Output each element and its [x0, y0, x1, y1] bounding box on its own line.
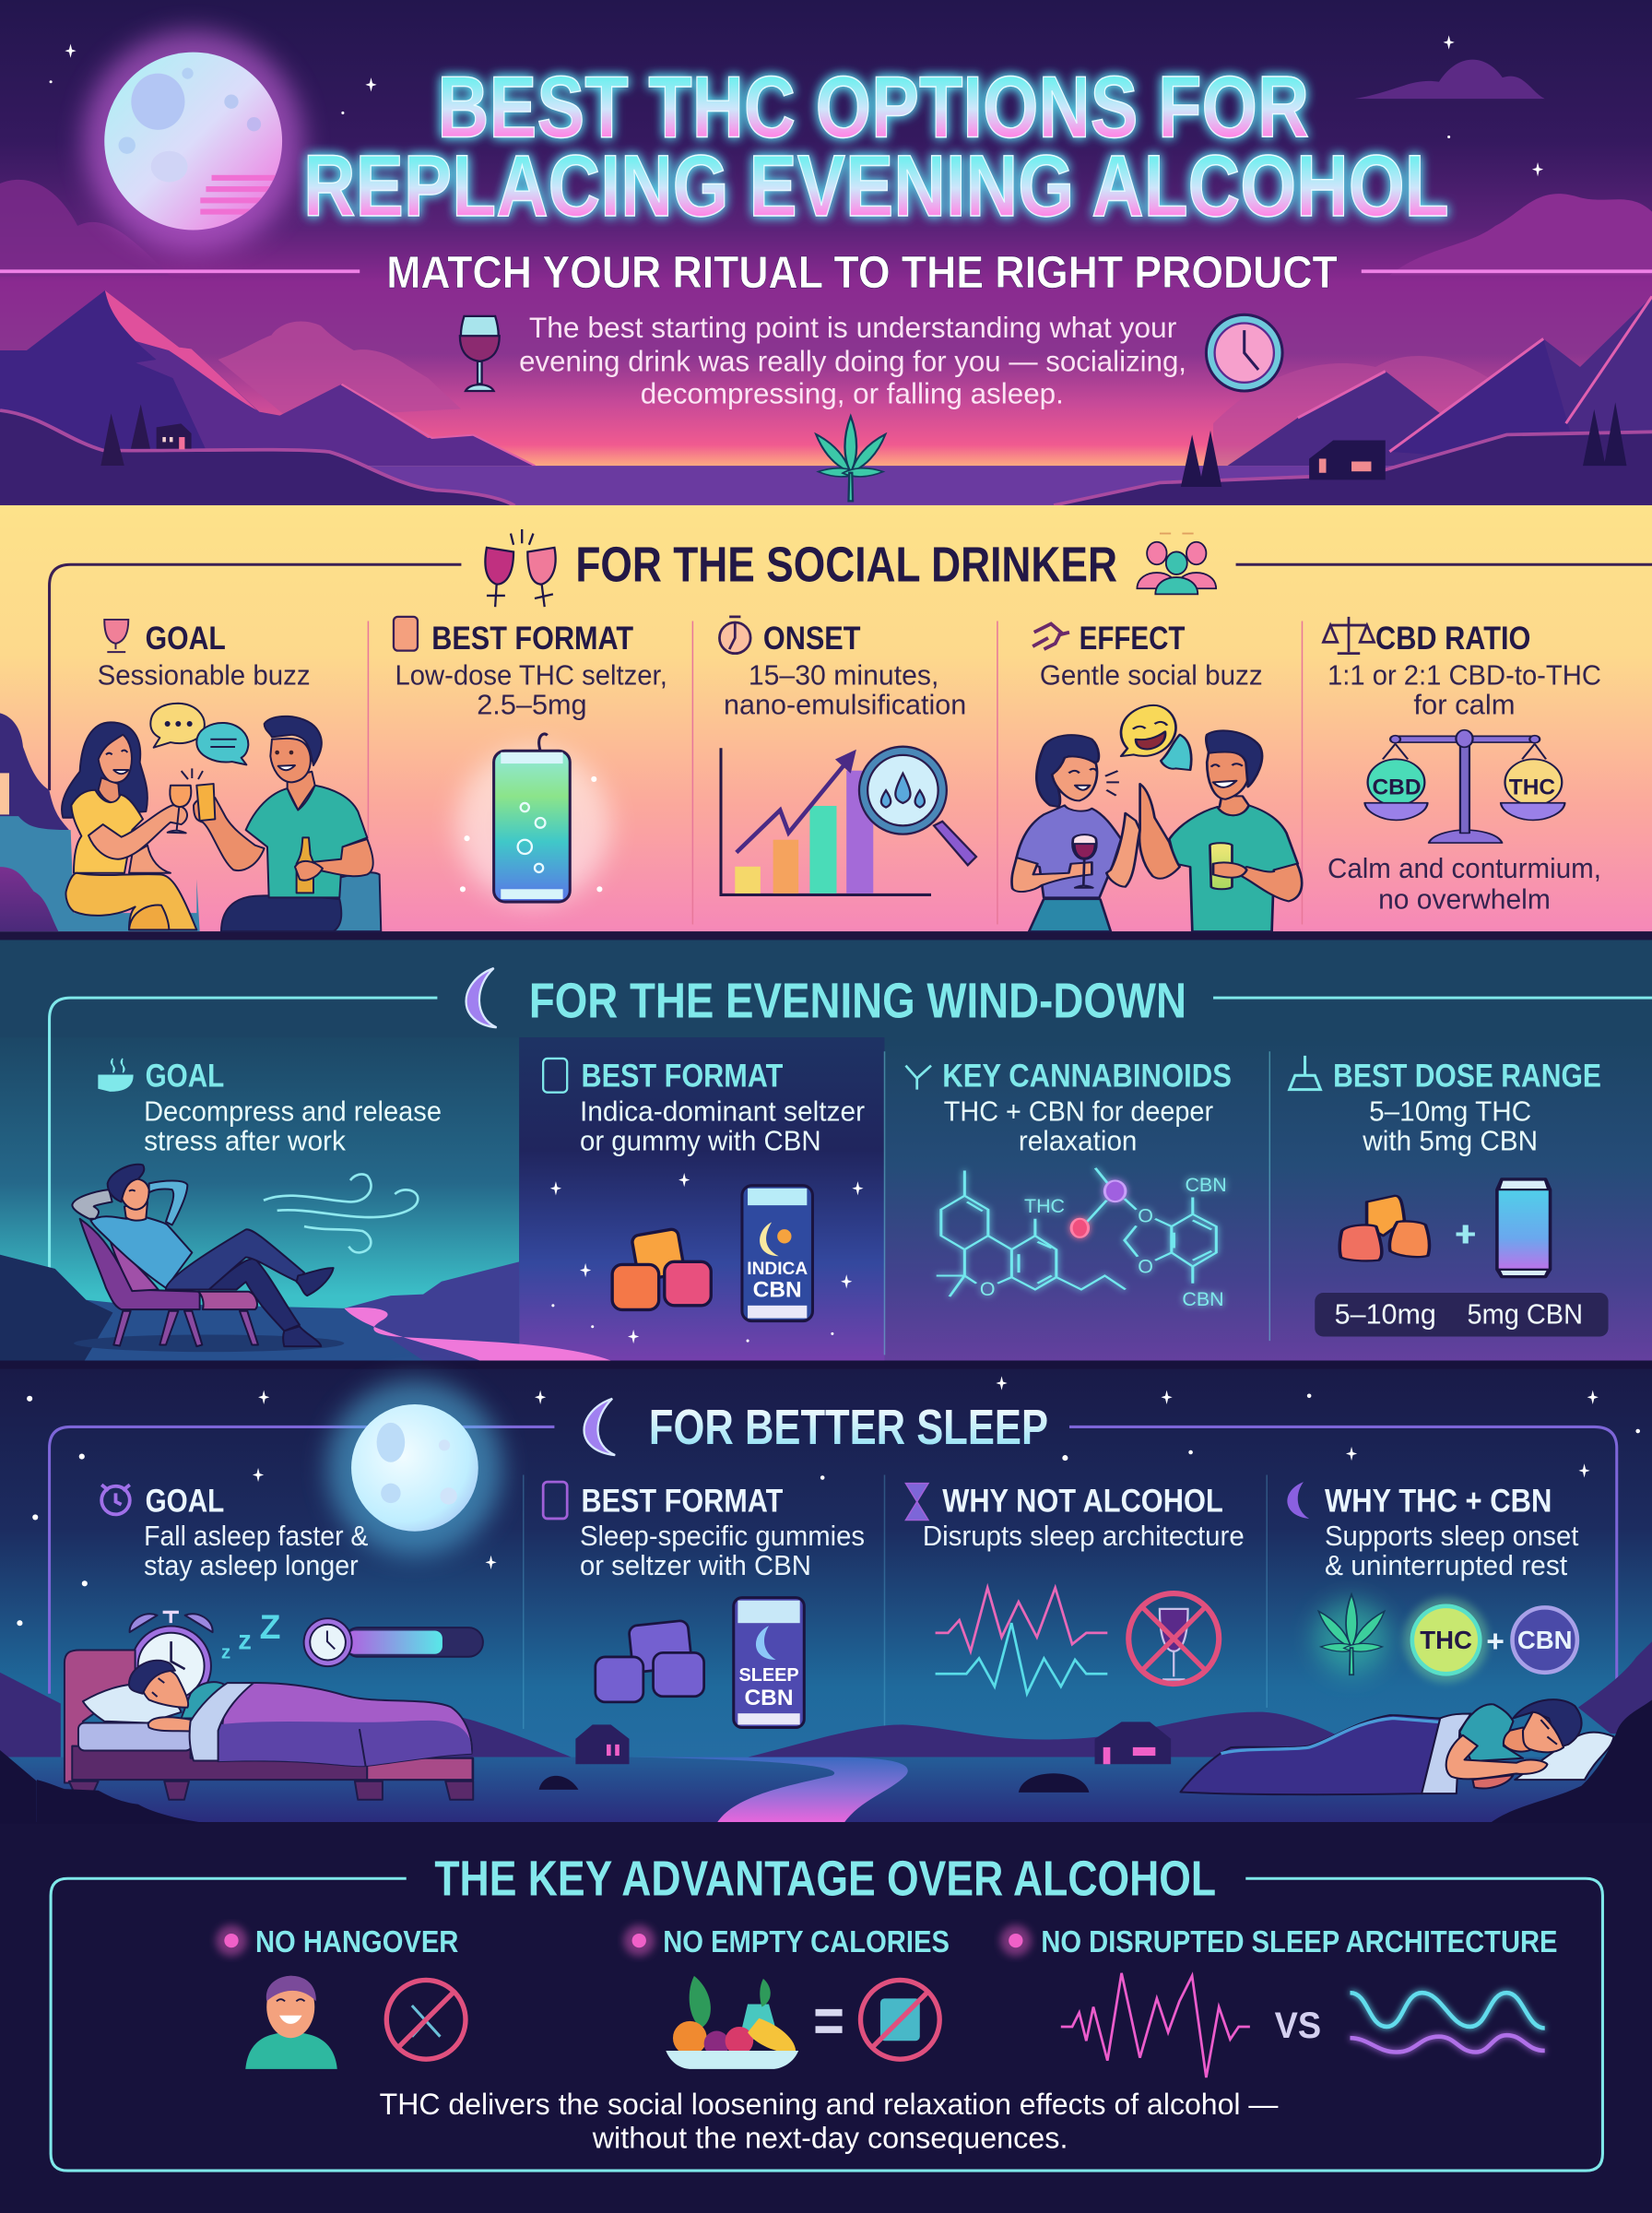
column: goal: Decompress and release — [144, 1095, 442, 1127]
moon — [327, 1380, 502, 1556]
icon: no hangover symbol — [386, 1980, 466, 2059]
column: best dose range: BEST DOSE RANGE — [1333, 1059, 1601, 1095]
icon: THC plus CBN — [1404, 1598, 1577, 1682]
illustration: CBD and THC scale: THC — [1509, 775, 1555, 800]
illustration: alarm clock, zzz and bed sleeper: z — [238, 1625, 252, 1655]
left shoreline — [0, 1750, 37, 1824]
chart: molecule diagram: O — [1138, 1256, 1153, 1278]
icon: crescent moon — [466, 968, 497, 1027]
benefit: no empty calories — [623, 1925, 950, 2069]
heading: FOR THE SOCIAL DRINKER — [575, 538, 1117, 593]
illustration: man reclining in chair — [72, 1165, 418, 1352]
frame and dividers — [50, 1426, 1617, 1729]
column: goal: GOAL — [146, 1483, 224, 1519]
column: best format: BEST FORMAT — [581, 1059, 784, 1095]
column: why thc + cbn: WHY THC + CBN — [1325, 1483, 1552, 1519]
intro text: The best starting point is understanding what your — [529, 312, 1176, 344]
illustration: couple toasting on sofa — [0, 704, 381, 931]
panel: better sleep — [0, 1369, 1652, 1828]
icon: THC plus CBN: + — [1486, 1625, 1504, 1659]
column: goal: stay asleep longer — [144, 1550, 359, 1581]
icon: molecule — [905, 1066, 931, 1090]
icon: clinking glasses — [485, 529, 556, 607]
icon: phone — [543, 1482, 567, 1519]
icon: fruit bowl — [666, 1976, 798, 2069]
subheading — [0, 248, 1652, 298]
icon: alarm clock — [101, 1485, 130, 1514]
column: onset — [719, 617, 966, 720]
illustration: alarm clock, zzz and bed sleeper: Z — [260, 1607, 280, 1646]
column: effect: Gentle social buzz — [1040, 659, 1263, 691]
column: best format — [543, 1482, 865, 1581]
chart: molecule diagram: THC — [1024, 1195, 1065, 1217]
benefit: no hangover: NO HANGOVER — [255, 1925, 458, 1959]
column: goal: GOAL — [146, 621, 226, 657]
column: cbd ratio: CBD RATIO — [1375, 621, 1530, 657]
illustration: alarm clock, zzz and bed sleeper: z — [221, 1641, 230, 1663]
icon: steaming bath — [99, 1059, 133, 1091]
icon: no alcohol — [1128, 1593, 1219, 1684]
column: why not alcohol: Disrupts sleep architecture — [923, 1521, 1245, 1552]
title: BEST THC OPTIONS FOR — [437, 58, 1309, 156]
column: best format: Sleep-specific gummies — [580, 1521, 865, 1552]
illustration: glowing seltzer can — [455, 734, 611, 904]
benefit: no disrupted sleep — [1000, 1925, 1557, 2077]
column: key cannabinoids: THC + CBN for deeper — [944, 1095, 1213, 1127]
icon: dropper — [1290, 1056, 1320, 1090]
heading: THE KEY ADVANTAGE OVER ALCOHOL — [434, 1852, 1216, 1907]
column: best dose range: 5–10mg THC — [1369, 1095, 1531, 1127]
intro text — [519, 312, 1186, 410]
icon: equals — [816, 2013, 843, 2030]
left mountains — [0, 290, 535, 467]
illustration: gummies — [612, 1228, 711, 1309]
column: key cannabinoids: relaxation — [1019, 1125, 1137, 1156]
column: why thc + cbn — [1287, 1482, 1579, 1581]
panel: key advantage — [0, 1824, 1652, 2213]
chart: molecule diagram: CBN — [1182, 1288, 1224, 1310]
illustration: CBD and THC scale — [1364, 730, 1564, 843]
title — [303, 58, 1449, 235]
frame and dividers — [50, 998, 1652, 1355]
frame — [51, 1878, 1602, 2171]
benefit: no empty calories: NO EMPTY CALORIES — [663, 1925, 950, 1959]
closing text: THC delivers the social loosening and relaxation effects of alcohol — — [380, 2088, 1279, 2121]
benefit: no hangover — [216, 1925, 466, 2069]
column: best format — [543, 1059, 865, 1156]
ground and river — [0, 1255, 611, 1361]
icon: clock — [1206, 314, 1282, 391]
chart: smooth THC waves — [1351, 1993, 1545, 2053]
icon: stopwatch — [719, 617, 750, 654]
text: vs: VS — [1275, 2006, 1321, 2046]
column: best format: BEST FORMAT — [581, 1483, 784, 1519]
column: cbd ratio: Calm and conturmium, — [1328, 853, 1601, 884]
illustration: sleep can — [734, 1598, 804, 1727]
illustration: sleeping person right — [1181, 1641, 1652, 1823]
icon: magnifier with droplets — [859, 747, 976, 865]
column: goal: Sessionable buzz — [98, 659, 311, 691]
icon: runner — [1032, 624, 1069, 649]
column: cbd ratio: 1:1 or 2:1 CBD-to-THC — [1328, 659, 1601, 691]
icon: crescent — [1287, 1482, 1309, 1519]
column: best format — [394, 617, 667, 720]
panel: social drinker — [0, 505, 1652, 940]
illustration: dose gummies, plus and can — [1339, 1178, 1551, 1277]
stars in format column — [550, 1173, 864, 1343]
column: best dose range — [1290, 1056, 1601, 1156]
frame and dividers — [50, 564, 1652, 925]
chart: molecule diagram: O — [1138, 1205, 1153, 1227]
icon: people — [1137, 534, 1216, 594]
icon: cannabis leaf — [1315, 1594, 1388, 1675]
icon: can — [394, 617, 418, 651]
title: REPLACING EVENING ALCOHOL — [303, 137, 1449, 235]
illustration: indica can — [742, 1186, 812, 1321]
icon: cannabis leaf — [812, 417, 890, 501]
column: goal — [101, 1483, 368, 1581]
closing text — [380, 2088, 1279, 2155]
heading: FOR THE EVENING WIND-DOWN — [529, 975, 1186, 1029]
column: best format: or seltzer with CBN — [580, 1550, 811, 1581]
panel: header — [0, 0, 1652, 505]
column: effect — [1032, 621, 1263, 691]
column: why thc + cbn: & uninterrupted rest — [1325, 1550, 1568, 1581]
callout: dose amounts: 5mg CBN — [1468, 1299, 1583, 1331]
chart: erratic alcohol wave — [1061, 1973, 1250, 2077]
landscape — [0, 1673, 1652, 1828]
icon: crescent moon — [584, 1399, 615, 1455]
stars — [17, 1376, 1640, 1626]
column: goal: Fall asleep faster & — [144, 1521, 368, 1552]
right mountains — [1227, 296, 1652, 466]
column: cbd ratio — [1323, 617, 1601, 916]
illustration: friends laughing — [1011, 705, 1302, 931]
illustration: sleep can: CBN — [745, 1686, 794, 1710]
column: why not alcohol: WHY NOT ALCOHOL — [942, 1483, 1223, 1519]
illustration: sleep can: SLEEP — [738, 1665, 799, 1686]
column: why thc + cbn: Supports sleep onset — [1325, 1521, 1579, 1552]
column: best format: 2.5–5mg — [477, 689, 587, 720]
moon — [83, 31, 303, 251]
heading: FOR BETTER SLEEP — [649, 1401, 1048, 1455]
column: key cannabinoids — [905, 1059, 1232, 1156]
illustration: indica can: INDICA — [747, 1260, 808, 1279]
chart: rising onset bars — [721, 748, 931, 894]
intro text: evening drink was really doing for you — socializing, — [519, 346, 1186, 378]
icon: THC plus CBN: THC — [1420, 1626, 1472, 1654]
chart: molecule diagram — [937, 1168, 1227, 1310]
column: best format: BEST FORMAT — [431, 621, 634, 657]
icon: THC plus CBN: CBN — [1517, 1626, 1573, 1654]
column: key cannabinoids: KEY CANNABINOIDS — [942, 1059, 1232, 1095]
column: onset: nano-emulsification — [724, 689, 966, 720]
column: goal: stress after work — [144, 1125, 347, 1156]
closing text: without the next-day consequences. — [592, 2122, 1068, 2155]
intro text: decompressing, or falling asleep. — [641, 378, 1064, 410]
benefit: no disrupted sleep: NO DISRUPTED SLEEP ARCHITECTURE — [1041, 1925, 1557, 1959]
column: onset: 15–30 minutes, — [749, 659, 938, 691]
icon: balance — [1323, 617, 1375, 654]
lake — [268, 466, 1397, 505]
illustration: alarm clock, zzz and bed sleeper — [37, 1607, 483, 1824]
chart: molecule diagram: CBN — [1185, 1174, 1227, 1196]
column: cbd ratio: no overwhelm — [1378, 884, 1551, 916]
illustration: CBD and THC scale: CBD — [1373, 775, 1422, 800]
column: cbd ratio: for calm — [1413, 689, 1516, 720]
icon: hourglass — [905, 1484, 928, 1520]
icon: wine glass — [460, 316, 500, 391]
stars — [50, 35, 1543, 176]
subheading: MATCH YOUR RITUAL TO THE RIGHT PRODUCT — [386, 248, 1338, 298]
column: best format: or gummy with CBN — [580, 1125, 821, 1156]
icon: smiling person — [245, 1976, 337, 2069]
clouds — [0, 60, 1652, 473]
illustration: purple gummies — [596, 1620, 704, 1702]
callout: dose amounts: 5–10mg — [1335, 1299, 1436, 1331]
column: goal — [98, 620, 311, 691]
callout: dose amounts — [1315, 1293, 1609, 1336]
column: best format: Indica-dominant seltzer — [580, 1095, 865, 1127]
left hill with tree and house — [0, 404, 514, 505]
panel: evening wind-down — [0, 940, 1652, 1369]
chart: molecule diagram: O — [980, 1278, 996, 1300]
column: best format: Low-dose THC seltzer, — [395, 659, 667, 691]
chart: disrupted sleep waves — [936, 1588, 1107, 1694]
column: best dose range: with 5mg CBN — [1362, 1125, 1538, 1156]
column: goal: GOAL — [146, 1059, 224, 1095]
icon: no calories symbol — [860, 1980, 939, 2059]
column: onset: ONSET — [763, 621, 861, 657]
right hill with trees and house — [1054, 402, 1652, 505]
icon: can — [543, 1059, 567, 1093]
icon: trophy — [104, 620, 128, 652]
illustration: indica can: CBN — [753, 1278, 802, 1303]
column: goal — [99, 1059, 442, 1156]
column: effect: EFFECT — [1080, 621, 1186, 657]
column: why not alcohol — [905, 1483, 1245, 1552]
